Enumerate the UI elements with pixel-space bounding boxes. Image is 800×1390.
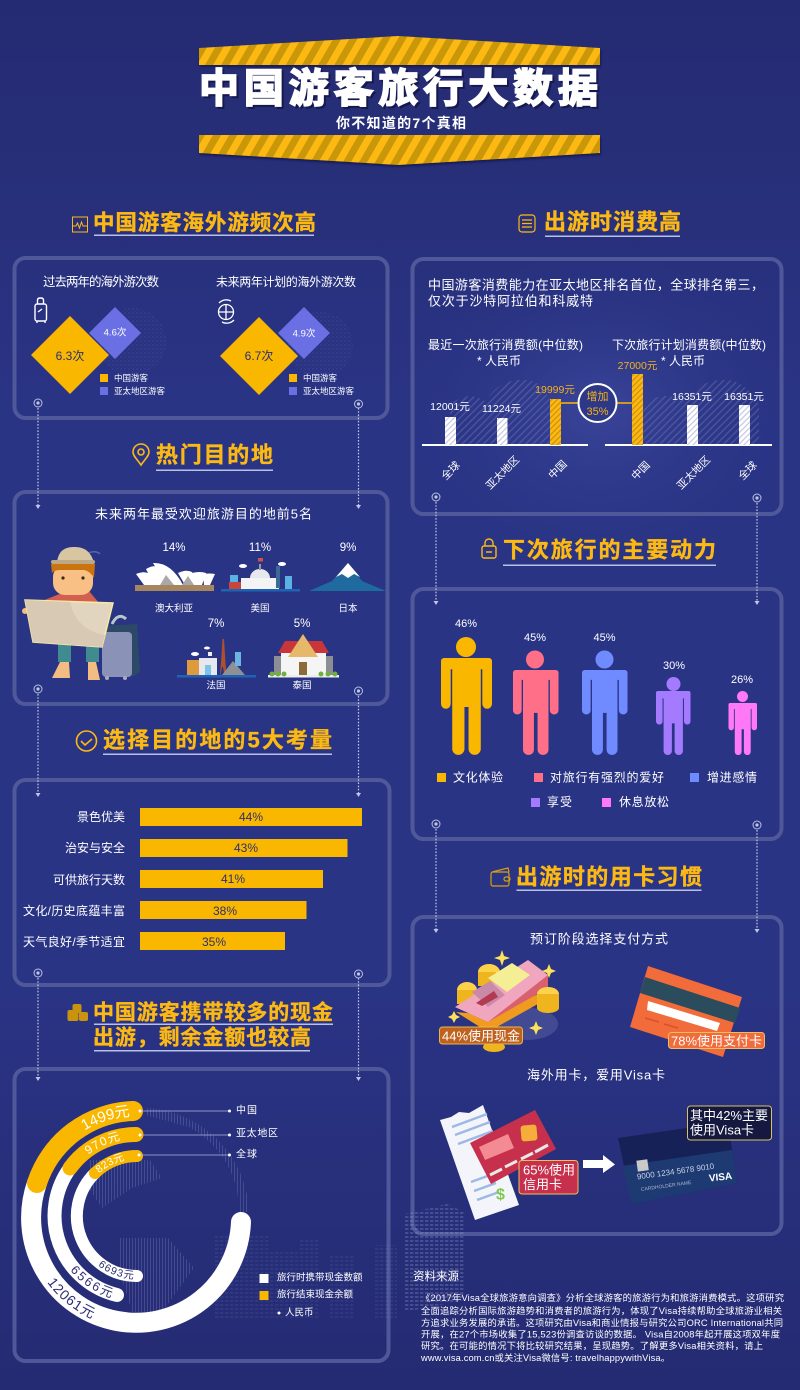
panel: card habits: 预订阶段选择支付方式	[530, 932, 668, 946]
person: relaxation	[728, 691, 757, 755]
bar chart: considerations: 景色优美	[77, 810, 125, 824]
panel: overseas trip counts: 未来两年计划的海外游次数	[216, 274, 356, 289]
ring legend: 旅行时携带现金数额	[277, 1272, 363, 1284]
person: enjoyment	[656, 677, 690, 755]
panel: spend: 下次旅行计划消费额(中位数)	[612, 337, 766, 352]
bar chart: considerations: 43%	[234, 841, 258, 855]
heading: high spend: 出游时消费高	[544, 210, 681, 234]
icon: american landmarks	[221, 558, 300, 592]
panel: overseas trip counts: 过去两年的海外游次数	[43, 274, 159, 289]
panel: card habits: 海外用卡，爱用Visa卡	[527, 1068, 665, 1082]
title banner	[199, 36, 600, 165]
text block: sources	[413, 1269, 784, 1363]
icon: french landmarks	[177, 639, 256, 678]
icon: coins	[68, 1004, 88, 1021]
icon: wallet	[491, 868, 510, 886]
callout: increase 35%: 35%	[586, 406, 609, 418]
axis labels: 中国	[629, 459, 653, 483]
person: bonding	[582, 650, 628, 755]
panel: top destinations: 11%	[249, 542, 271, 554]
panel: top destinations: 14%	[162, 542, 186, 554]
subtitle: 你不知道的7个真相	[336, 115, 466, 131]
callout: increase 35%	[561, 384, 632, 422]
bar chart: considerations: 天气良好/季节适宜	[23, 934, 125, 949]
bar chart: considerations	[23, 808, 362, 950]
icon: chart	[72, 217, 88, 232]
panel: overseas trip counts	[31, 274, 356, 396]
callout: 65% credit card: 信用卡	[523, 1177, 562, 1192]
icon: mount fuji	[309, 563, 386, 591]
legend: 中国游客	[114, 373, 149, 383]
callout: 65% credit card	[519, 1160, 578, 1194]
diamond pair: past: 6.3次	[56, 349, 84, 363]
connector lines	[34, 399, 761, 1081]
panel: top destinations: 日本	[338, 602, 358, 614]
panel: card habits	[440, 932, 772, 1220]
legend: 休息放松	[619, 794, 669, 809]
callout: 42% visa	[688, 1106, 772, 1140]
panel: motivations: 30%	[663, 660, 685, 672]
ring value labels: 823元	[96, 1152, 124, 1172]
illustration: receipt and credit card: $	[496, 1186, 505, 1204]
bar chart: considerations: 38%	[213, 904, 237, 918]
ring value labels: 1499元	[82, 1104, 130, 1130]
panel: cash ring chart	[21, 1101, 363, 1333]
callout: increase 35%: 增加	[586, 389, 608, 403]
bar chart: next trip: 27000元	[618, 360, 658, 372]
icon: globe arrows	[218, 300, 234, 323]
panel outlines	[14, 258, 782, 1361]
icon: thai temple	[268, 634, 339, 678]
text block: sources: www.visa.com.cn或关注Visa微信号: travelhappywithVisa。	[420, 1352, 670, 1363]
ring legend: 人民币	[285, 1308, 314, 1318]
bar chart: last trip: 12001元	[430, 401, 470, 413]
person: culture	[441, 637, 492, 755]
panel: cash ring chart: 亚太地区	[236, 1126, 278, 1140]
legend: 亚太地区游客	[114, 386, 166, 396]
heading: cash: 中国游客携带较多的现金	[93, 1000, 333, 1024]
ring value labels: 970元	[84, 1132, 120, 1154]
bar chart: considerations: 35%	[202, 935, 226, 949]
arrow	[583, 1155, 615, 1173]
text block: sources: 研究。在可能的情况下将比较研究结果，呈现趋势。了解更多Visa相关资料，请上	[421, 1340, 763, 1351]
diamond pair: future: 6.7次	[245, 349, 273, 363]
panel: motivations: 45%	[524, 632, 546, 644]
illustration: payment card	[630, 966, 742, 1057]
illustration: visa card: VISA	[708, 1171, 733, 1184]
background: city silhouette	[215, 1204, 464, 1320]
text block: sources: 方追求业务发展的承诺。这项研究由Visa和商业情报与研究公司ORC International共同	[421, 1317, 783, 1328]
heading: top considerations: 选择目的地的5大考量	[103, 728, 332, 752]
heading: overseas trip frequency: 中国游客海外游频次高	[93, 210, 316, 235]
background: globe	[90, 1108, 249, 1312]
diamond pair: future: 4.9次	[293, 328, 316, 340]
panel: spend: 最近一次旅行消费额(中位数)	[428, 337, 583, 352]
legend: 中国游客	[303, 373, 338, 383]
icon: list	[519, 215, 535, 232]
ring value labels: 12061元	[48, 1278, 95, 1318]
panel: top destinations: 法国	[206, 680, 226, 692]
panel: top destinations: 未来两年最受欢迎旅游目的地前5名	[95, 506, 312, 522]
text block: sources: 开展，在27个市场收集了15,523份调查访谈的数据。 Visa自2008年起开展这项双年度	[421, 1328, 780, 1340]
icon: pin	[133, 444, 149, 465]
legend	[437, 770, 757, 809]
icon: suitcase	[35, 298, 46, 323]
panel: cash ring chart: 全球	[236, 1148, 257, 1160]
axis labels	[439, 453, 760, 492]
heading: cash: 出游，剩余金额也较高	[93, 1026, 311, 1050]
diamond pair: past	[31, 307, 141, 394]
illustration: receipt and credit card	[440, 1105, 556, 1220]
axis labels: 中国	[546, 458, 570, 482]
illustration: visa card	[618, 1122, 737, 1204]
main title: 中国游客旅行大数据	[199, 67, 598, 111]
bar chart: considerations: 治安与安全	[65, 840, 125, 855]
legend: 增进感情	[707, 770, 757, 784]
bar chart: considerations: 可供旅行天数	[53, 872, 125, 887]
ring leader lines	[140, 1111, 229, 1155]
legend: 享受	[547, 794, 572, 809]
callout: 78% payment card: 78%使用支付卡	[671, 1034, 762, 1048]
bar chart: considerations: 41%	[221, 872, 245, 886]
ring value labels: 6693元	[99, 1261, 134, 1280]
panel: top destinations: 澳大利亚	[155, 602, 193, 614]
bottom striped banner	[199, 135, 600, 165]
text block: sources: 《2017年Visa全球旅游意向调查》分析全球游客的旅游行为和旅游消费模式。这项研究	[421, 1292, 784, 1303]
heading: top destinations: 热门目的地	[156, 442, 273, 468]
icon: check circle	[76, 731, 96, 751]
panel: motivations: 26%	[731, 674, 753, 686]
legend: 文化体验	[453, 770, 503, 784]
panel: top destinations: 泰国	[292, 680, 312, 692]
callout: 42% visa: 使用Visa卡	[690, 1122, 754, 1138]
ring legend	[260, 1272, 363, 1318]
panel: spend: 中国游客消费能力在亚太地区排名首位，全球排名第三，	[428, 278, 764, 292]
panel: motivations: 45%	[593, 632, 616, 644]
person: passion	[513, 650, 558, 755]
axis labels: 亚太地区	[483, 453, 522, 492]
bar chart: last trip	[422, 384, 588, 446]
panel: spend	[422, 278, 772, 492]
heading: motivations: 下次旅行的主要动力	[503, 538, 716, 562]
callout: 44% cash: 44%使用现金	[442, 1028, 520, 1044]
ring series: global / asia-pacific / china	[31, 1111, 241, 1323]
axis labels: 全球	[736, 458, 760, 483]
dotted globes	[98, 308, 353, 378]
panel: spend: * 人民币	[477, 354, 521, 368]
panel: motivations	[437, 618, 757, 809]
text block: sources: 全面追踪分析国际旅游趋势和消费者的旅游行为，体现了Visa持续帮助全球旅游业相关	[421, 1305, 782, 1316]
text block: sources: 资料来源	[413, 1269, 459, 1283]
panel: spend: 仅次于沙特阿拉伯和科威特	[428, 294, 593, 308]
ring legend: 旅行结束现金余额	[277, 1288, 354, 1300]
icon: sydney opera house	[135, 563, 215, 591]
panel: motivations: 46%	[455, 618, 477, 630]
panel: top destinations	[22, 506, 386, 692]
diamond pair: future	[220, 307, 330, 395]
legend: 亚太地区游客	[303, 386, 355, 396]
illustration: visa card: CARDHOLDER NAME	[641, 1180, 692, 1193]
icon: lock	[482, 539, 496, 558]
callout: 65% credit card: 65%使用	[523, 1162, 575, 1178]
heading: cash	[68, 1000, 333, 1052]
panel: spend: * 人民币	[661, 354, 705, 368]
bar chart: considerations: 44%	[239, 810, 263, 824]
illustration: traveller with map	[22, 547, 140, 680]
legend	[100, 373, 355, 396]
bar chart: next trip: 16351元	[672, 391, 712, 403]
callout: 42% visa: 其中42%主要	[690, 1108, 768, 1123]
illustration: cash and coins	[448, 950, 559, 1052]
panel: top destinations: 9%	[340, 542, 356, 554]
legend: 对旅行有强烈的爱好	[550, 770, 664, 784]
diamond pair: past: 4.6次	[104, 326, 127, 338]
bar chart: next trip	[605, 360, 772, 446]
axis labels: 全球	[439, 458, 463, 483]
top striped banner	[199, 36, 600, 65]
panel: top destinations: 美国	[250, 602, 270, 614]
heading: card habits: 出游时的用卡习惯	[516, 864, 702, 890]
bar chart: last trip: 19999元	[535, 384, 575, 396]
bar chart: considerations: 文化/历史底蕴丰富	[23, 903, 125, 918]
hatched hills	[450, 380, 759, 445]
panel: top destinations: 5%	[294, 618, 310, 630]
bar chart: last trip: 11224元	[482, 403, 521, 415]
illustration: visa card: 9000 1234 5678 9010	[636, 1162, 715, 1181]
ring value labels: 6566元	[72, 1266, 113, 1298]
ring value labels	[48, 1104, 134, 1318]
axis labels: 亚太地区	[674, 453, 713, 492]
bar chart: next trip: 16351元	[724, 391, 764, 403]
panel: cash ring chart: 中国	[236, 1104, 257, 1116]
panel: top destinations: 7%	[208, 618, 224, 630]
